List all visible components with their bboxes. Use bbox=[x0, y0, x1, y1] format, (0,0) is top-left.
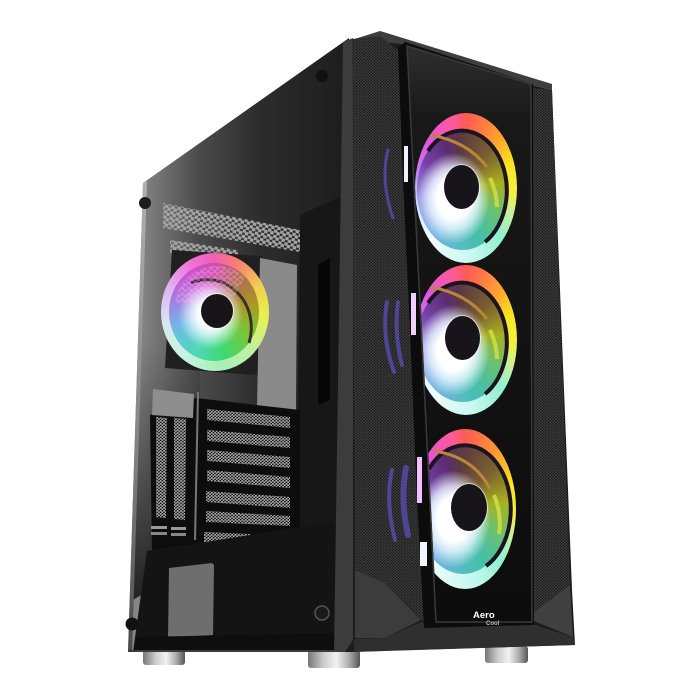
bottom band bbox=[354, 622, 575, 652]
io plate bbox=[152, 389, 194, 418]
top vent holes bbox=[163, 203, 300, 252]
top trim bbox=[345, 31, 552, 90]
drive plate bbox=[257, 258, 297, 412]
fan bottom bbox=[428, 429, 516, 589]
front glass panel bbox=[407, 46, 532, 622]
pci slots bbox=[204, 409, 290, 544]
vertical vents bbox=[151, 392, 199, 540]
psu shroud bbox=[133, 521, 340, 652]
aerocool logo bbox=[473, 610, 500, 627]
expansion slot area bbox=[150, 398, 300, 552]
right mesh bbox=[532, 88, 570, 612]
foot left bbox=[143, 650, 185, 665]
foot middle bbox=[308, 650, 360, 668]
rear slot bbox=[318, 258, 330, 405]
center frame bbox=[398, 42, 534, 628]
base of front bbox=[345, 40, 575, 652]
aerocool logo: Cool bbox=[486, 621, 500, 627]
fan bracket bbox=[165, 250, 268, 376]
upper fan vent holes bbox=[170, 240, 238, 262]
lit edge of glass bbox=[128, 181, 147, 652]
lower right trim bbox=[534, 585, 573, 637]
thin bottom line bbox=[128, 650, 354, 652]
purple fan glow arcs bbox=[385, 150, 408, 540]
lower bezel bbox=[133, 633, 340, 652]
aerocool logo: Aero bbox=[473, 610, 495, 621]
fan top bbox=[415, 113, 517, 263]
glowing frame slits bbox=[404, 146, 427, 566]
corner pillar bbox=[334, 38, 355, 652]
fan middle bbox=[415, 265, 517, 415]
foot right bbox=[485, 646, 528, 663]
psu plate bbox=[168, 563, 214, 638]
front fans bbox=[415, 113, 517, 589]
darkening of lower glass bbox=[133, 340, 200, 600]
side fan bbox=[161, 253, 269, 371]
left mesh bbox=[352, 36, 424, 622]
side glass panel bbox=[128, 38, 354, 652]
dark rear interior bbox=[297, 195, 345, 530]
screws bbox=[126, 70, 329, 630]
lower left trim bbox=[355, 570, 421, 638]
